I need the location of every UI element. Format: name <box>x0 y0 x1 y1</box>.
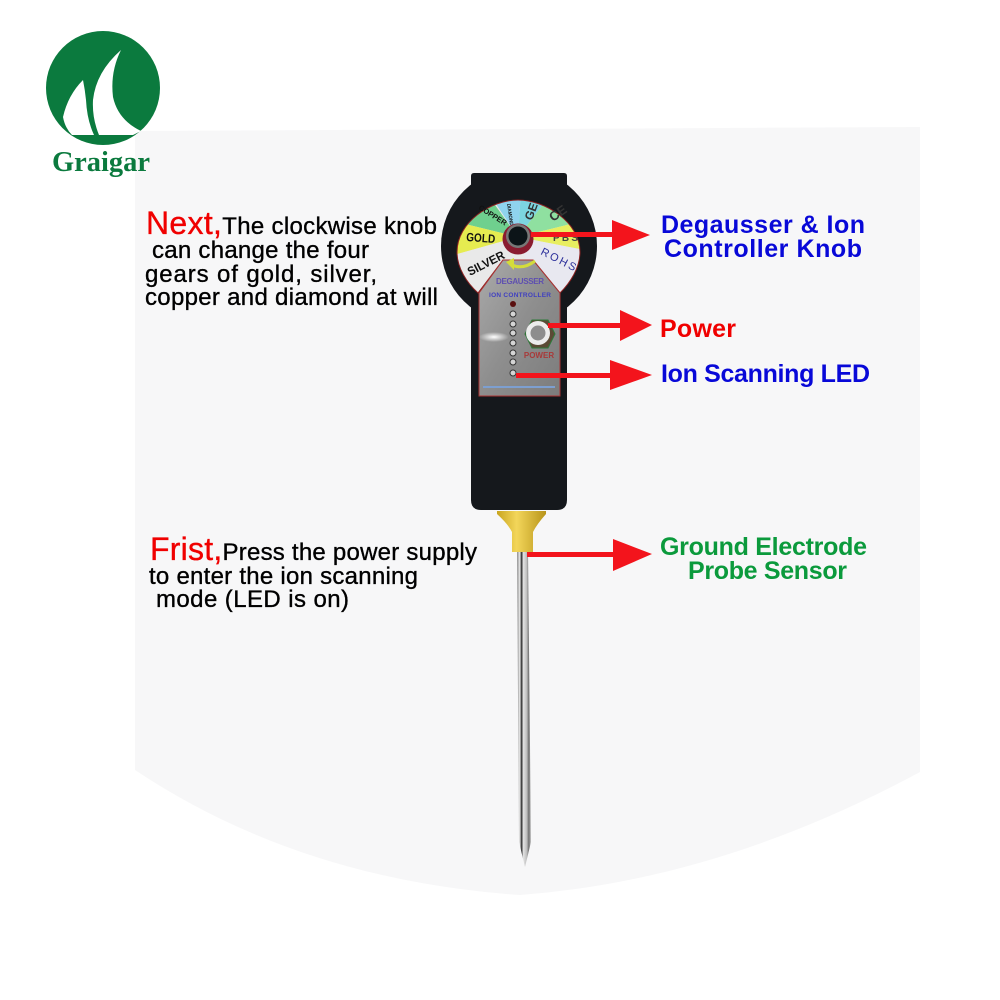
gold collar <box>497 511 546 552</box>
logo <box>46 31 160 178</box>
text: next: copper and diamond at will <box>145 284 438 311</box>
plate highlight <box>479 332 509 342</box>
power label: POWER <box>524 351 554 360</box>
dial labels: DIAMOND <box>505 203 514 226</box>
dial labels: GE <box>522 201 541 222</box>
logo wordmark: Graigar <box>52 146 150 178</box>
label: probe: Ground Electrode <box>660 533 867 561</box>
dial labels: CE <box>546 202 570 224</box>
logo mark <box>46 31 160 145</box>
device: meter: ION CONTROLLER <box>489 292 551 299</box>
label: LED: Ion Scanning LED <box>661 360 870 388</box>
label: probe: Probe Sensor <box>688 557 847 585</box>
dial labels: GOLD <box>466 230 496 246</box>
text: first: mode (LED is on) <box>156 586 349 613</box>
label: knob: Controller Knob <box>664 235 862 263</box>
text: first: Frist,Press the power supply <box>150 531 477 567</box>
arrow: probe <box>527 539 652 571</box>
dial labels: SILVER <box>465 248 507 279</box>
arrow: LED <box>516 360 652 390</box>
device: meter <box>441 168 597 867</box>
label: knob: Degausser & Ion <box>661 211 865 239</box>
label: knob <box>661 211 865 263</box>
plate footer strip <box>483 386 555 388</box>
plate title: DEGAUSSER <box>496 277 544 286</box>
text: first: to enter the ion scanning <box>149 563 418 590</box>
gray control plate <box>479 260 560 396</box>
dial curved arrow <box>506 258 535 270</box>
text: next <box>145 205 438 311</box>
dial rim <box>457 200 580 293</box>
label: probe <box>660 533 867 585</box>
infographic canvas <box>46 31 869 867</box>
background panel <box>135 127 920 895</box>
label: power: Power <box>660 315 736 343</box>
dial wedges <box>458 200 580 292</box>
dial labels: ROHS <box>539 246 578 274</box>
power button <box>525 320 555 348</box>
dial labels: COPPER <box>477 203 509 228</box>
text: next: gears of gold, silver, <box>145 261 377 288</box>
dial labels: PBS <box>553 233 578 244</box>
probe needle <box>517 550 531 867</box>
dial labels <box>465 201 578 279</box>
arrow: power <box>548 310 652 341</box>
text: next: can change the four <box>152 237 369 264</box>
arrow: knob <box>531 220 650 250</box>
LED column <box>510 301 516 376</box>
meter body <box>441 168 597 510</box>
text: first <box>149 531 477 613</box>
text: next: Next,The clockwise knob <box>146 205 437 241</box>
knob <box>502 224 534 254</box>
